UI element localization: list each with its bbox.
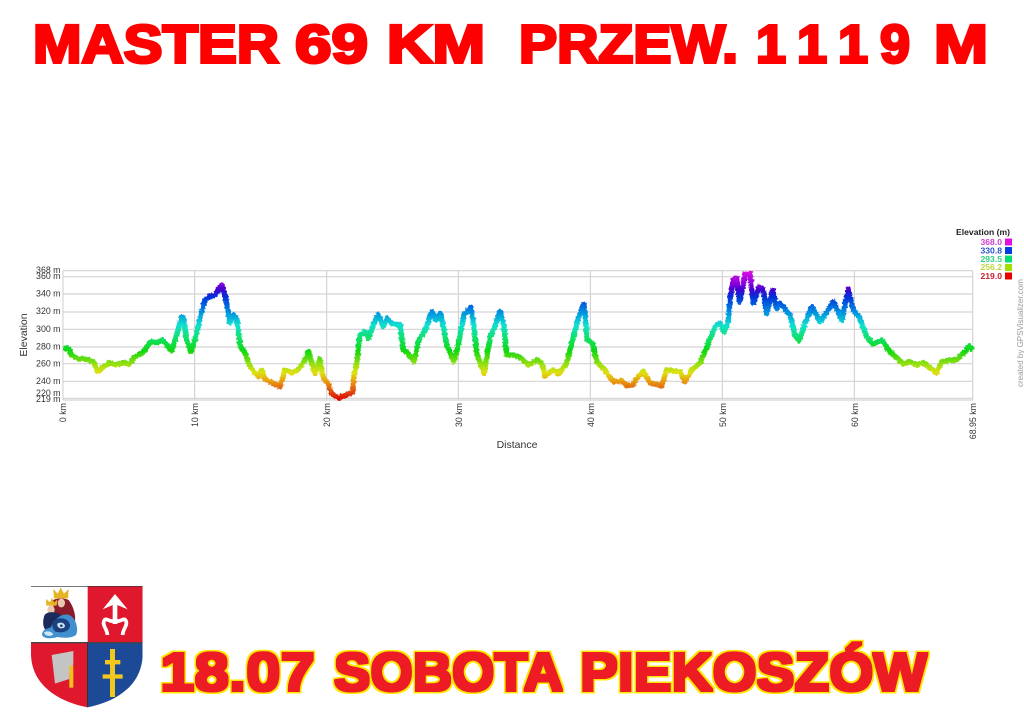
title: 69 — [295, 14, 368, 74]
title — [33, 14, 988, 74]
y axis labels: 220 m — [36, 388, 60, 398]
legend: 293.5 — [980, 254, 1002, 264]
icon: white arrow emblem — [103, 594, 128, 635]
legend: 330.8 — [980, 246, 1002, 256]
y axis labels — [36, 265, 60, 404]
x axis labels — [58, 403, 978, 439]
legend: 256.2 — [980, 262, 1002, 272]
x axis title: Distance — [497, 439, 538, 451]
title: 1119 — [756, 14, 910, 74]
x axis labels: 0 km — [58, 403, 68, 422]
y axis labels: 320 m — [36, 306, 60, 316]
coat of arms — [31, 585, 143, 709]
x axis labels: 10 km — [190, 403, 200, 427]
icon: axe — [52, 651, 73, 688]
icon: double cross — [103, 649, 123, 697]
icon: madonna and child — [42, 588, 77, 638]
y axis title: Elevation — [18, 313, 30, 357]
x axis labels: 20 km — [322, 403, 332, 427]
x axis labels: 40 km — [586, 403, 596, 427]
legend — [956, 227, 1012, 281]
date and place banner: SOBOTA — [334, 642, 563, 702]
x axis labels: 60 km — [850, 403, 860, 427]
x axis labels: 50 km — [718, 403, 728, 427]
y axis labels: 340 m — [36, 288, 60, 298]
x axis labels: 30 km — [454, 403, 464, 427]
title: KM — [387, 14, 485, 74]
y axis labels: 260 m — [36, 358, 60, 368]
date and place banner — [160, 642, 927, 702]
date and place banner: 18.07 — [160, 642, 315, 702]
y axis labels: 280 m — [36, 342, 60, 352]
legend: 219.0 — [980, 271, 1002, 281]
x axis labels: 68.95 km — [968, 403, 978, 439]
date and place banner: PIEKOSZÓW — [580, 642, 927, 702]
elevation chart — [18, 265, 978, 451]
y axis labels: 219 m — [36, 394, 60, 404]
title: MASTER — [33, 14, 279, 74]
y axis labels: 368 m — [36, 265, 60, 275]
y axis labels: 240 m — [36, 376, 60, 386]
title: PRZEW. — [519, 14, 738, 74]
title: M — [934, 14, 988, 74]
y axis labels: 300 m — [36, 324, 60, 334]
y axis labels: 360 m — [36, 271, 60, 281]
legend: 368.0 — [980, 237, 1002, 247]
legend: Elevation (m) — [956, 227, 1010, 237]
elevation profile line — [63, 274, 973, 398]
